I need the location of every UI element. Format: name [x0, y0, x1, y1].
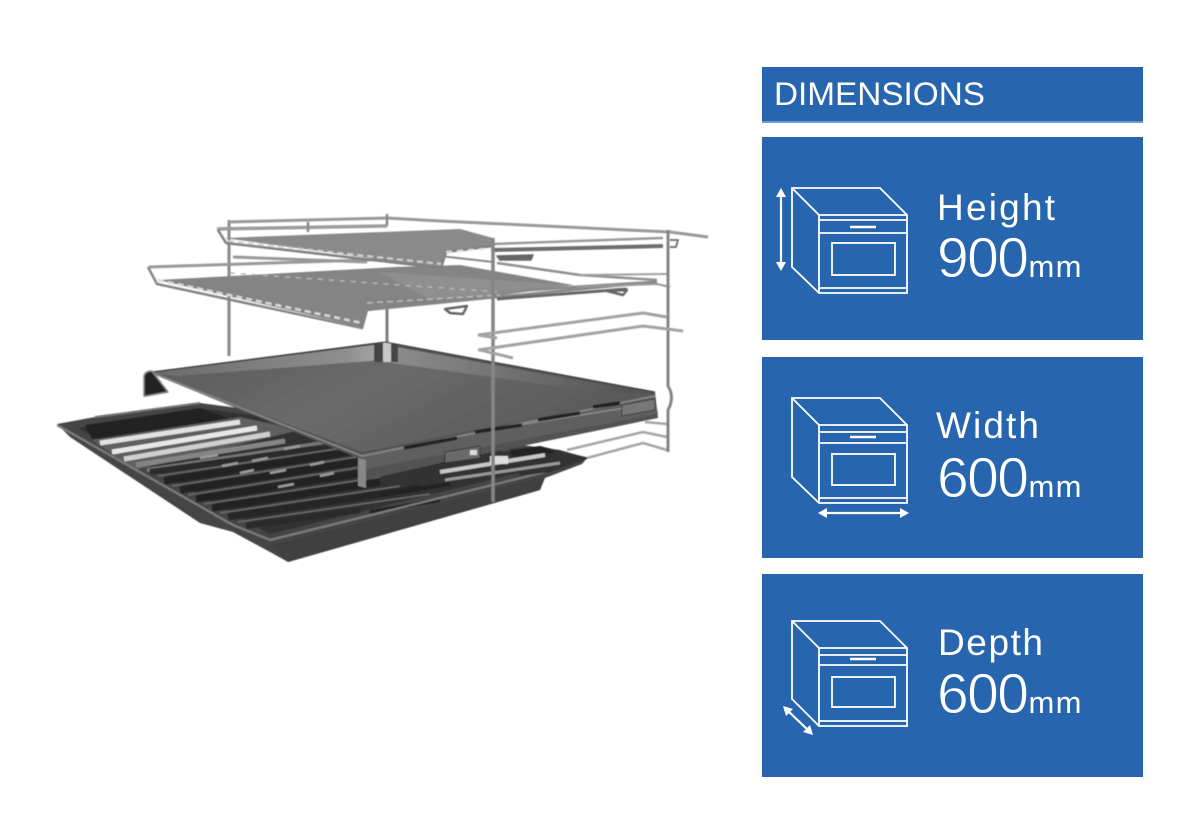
- back support post: [228, 220, 230, 356]
- icon: oven with diagonal arrow: [783, 621, 907, 735]
- middle wire shelf: [148, 257, 670, 328]
- lower deep tray: [57, 403, 587, 562]
- panel: height: [762, 137, 1143, 340]
- top wire shelf: [217, 214, 708, 268]
- product photo: multi-level oven shelf set: [57, 214, 708, 562]
- icon: oven with horizontal arrow: [792, 398, 909, 518]
- slide rails under the tray: [440, 422, 667, 480]
- icon: oven with vertical arrow: [776, 188, 907, 293]
- label: Width: Width: [936, 405, 1039, 446]
- panel: depth: [762, 574, 1143, 777]
- right side frame and wires: [478, 230, 683, 502]
- panel: width: [762, 357, 1143, 558]
- label: Height: Height: [937, 187, 1056, 228]
- header bar: DIMENSIONS: [762, 67, 1143, 123]
- value: 900mm: 900mm: [937, 226, 1081, 290]
- label: Depth: Depth: [938, 622, 1043, 663]
- flat baking tray: [144, 342, 658, 488]
- value: 600mm: 600mm: [937, 662, 1081, 726]
- value: 600mm: 600mm: [937, 446, 1081, 510]
- header bar: DIMENSIONS: DIMENSIONS: [774, 76, 985, 112]
